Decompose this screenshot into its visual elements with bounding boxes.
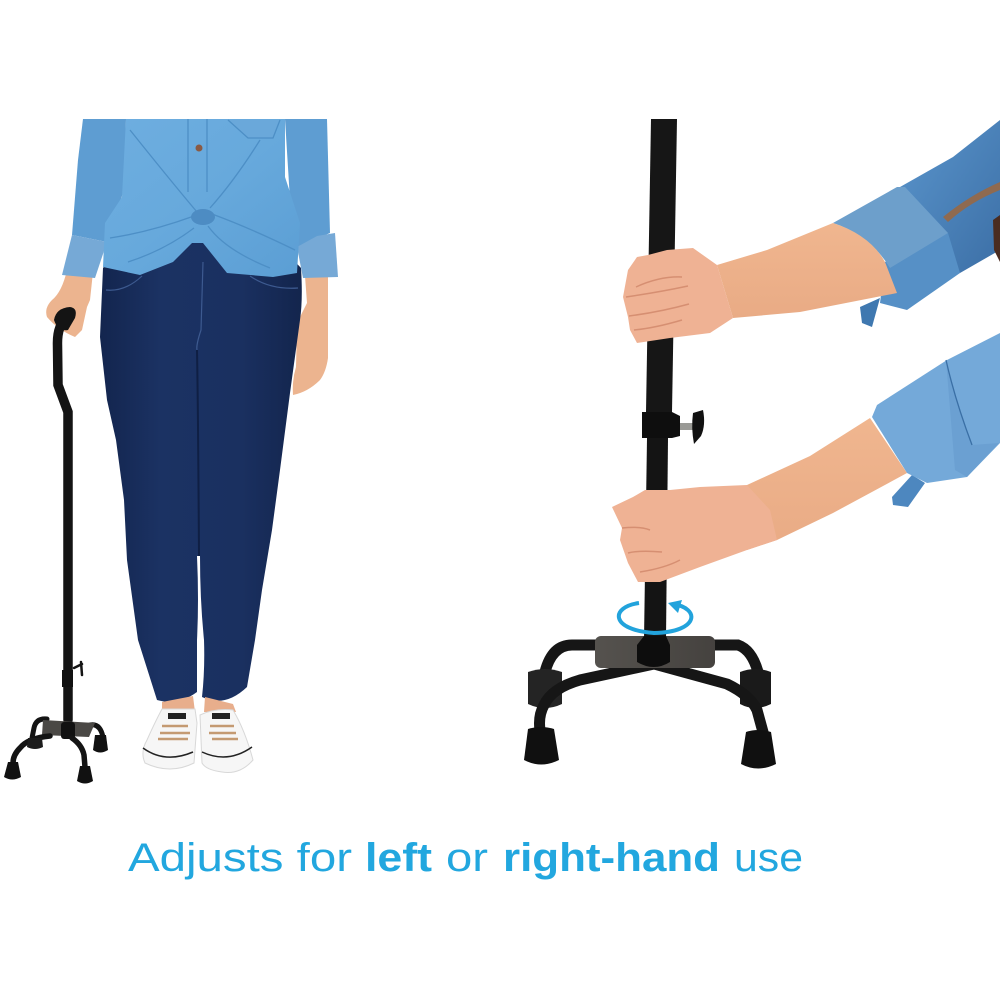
caption: left (365, 836, 432, 880)
cane lower shaft (644, 438, 668, 640)
height collar (642, 412, 680, 438)
right sleeve (285, 119, 330, 247)
left shoe (143, 709, 197, 769)
jeans details (106, 262, 298, 556)
lower arm (747, 418, 907, 550)
ankles (162, 696, 236, 712)
caption: or (446, 836, 488, 880)
upper sleeve (833, 120, 1000, 327)
caption: right-hand (503, 836, 720, 880)
caption (128, 836, 803, 880)
upper arm (717, 223, 897, 318)
right shoe (200, 710, 253, 772)
right panel: hands adjusting cane (524, 119, 1000, 768)
rotation arrow (619, 600, 691, 633)
shirt knot (191, 209, 215, 225)
left panel: woman standing with cane (4, 119, 338, 784)
jeans (100, 235, 302, 702)
shirt button (196, 144, 202, 152)
lower sleeve (872, 333, 1000, 507)
shoe laces (158, 726, 238, 739)
lower fingers (622, 527, 680, 572)
left sleeve (72, 119, 126, 242)
right arm and hand (293, 276, 328, 395)
quad base (524, 636, 776, 768)
lower hand (612, 485, 777, 582)
upper fingers (626, 277, 689, 330)
caption: Adjusts for (128, 836, 352, 880)
caption: use (734, 836, 803, 880)
cane upper shaft (646, 119, 677, 412)
right cuff (297, 233, 338, 278)
upper hand (623, 248, 733, 343)
adjustment knob (680, 410, 704, 444)
left arm and hand (46, 270, 93, 337)
shirt body (103, 119, 300, 277)
shoe soles and tags (143, 713, 252, 757)
cane with base (4, 307, 108, 784)
left cuff (62, 235, 107, 278)
shirt details (110, 119, 295, 268)
